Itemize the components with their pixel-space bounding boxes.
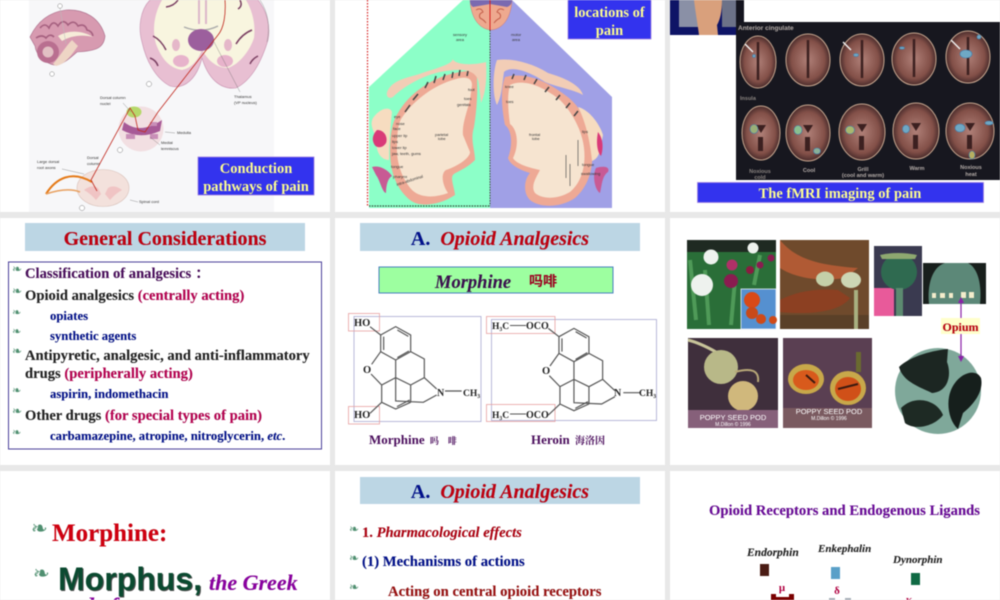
heading: general considerations: General Considerations (64, 228, 267, 250)
anatomy labels (37, 40, 257, 204)
scan labels: Anterior cingulate (738, 25, 794, 32)
chart: morphine structure: HO (354, 410, 370, 421)
text block: classification of analgesics: carbamazepine, atropine, nitroglycerin, etc. (50, 429, 285, 443)
motor cortex: area (512, 37, 521, 42)
scan labels: Grill (857, 167, 869, 173)
chart: morphine structure: O (363, 365, 371, 376)
arrows on scans (745, 40, 960, 52)
caption: morphine: Morphine 吗 啡 (369, 432, 457, 447)
subheading: morphine (379, 267, 613, 293)
ligand: enkephalin: Enkephalin (817, 543, 871, 555)
subheading: morphine: 吗啡 (529, 274, 557, 290)
photo: raw opium lumps (895, 348, 982, 434)
scan labels: Noxious (960, 165, 982, 171)
callout: fMRI imaging of pain (698, 182, 984, 202)
anatomy labels: Medial (161, 140, 173, 145)
sensory cortex: intra-abdominal (396, 174, 424, 187)
heading: opioid analgesics: A. Opioid Analgesics (411, 228, 589, 250)
sensory cortex: nose (396, 121, 405, 126)
photo: dried poppy seed pods: M.Dillon © 1996 (715, 421, 751, 428)
text block: mechanisms: ❧ (349, 551, 359, 565)
ligand: endorphin: μ (779, 582, 786, 594)
chart: morphine structure (348, 314, 481, 424)
scan labels: heat (965, 172, 977, 178)
text block: morphine definition (31, 516, 298, 600)
activation spots (750, 35, 993, 159)
anatomy labels: Dorsal (87, 155, 99, 160)
anatomy labels: Medulla (177, 130, 192, 135)
text block: morphine definition: Morphus, (58, 561, 202, 597)
anatomy labels: Spinal cord (139, 199, 159, 204)
photo: cut poppy seed pods (783, 338, 872, 428)
ligand: dynorphin (892, 554, 943, 600)
text block: classification of analgesics: ❧ (12, 284, 22, 298)
scan labels: Cool (803, 168, 816, 174)
scan labels (738, 25, 982, 181)
sensory cortex: upper lip (392, 133, 408, 138)
text block: mechanisms: 1. Pharmacological effects (362, 525, 522, 541)
panel: conduction pathways of pain (0, 0, 330, 212)
text block: classification of analgesics: synthetic agents (50, 329, 136, 343)
chart: heroin structure: O (542, 366, 550, 377)
sensory cortex: genitals (457, 102, 471, 107)
photo: hand on sensor array (670, 0, 744, 35)
sensory cortex (372, 32, 486, 205)
motor cortex (494, 32, 608, 206)
sensory cortex: tongue (391, 164, 404, 169)
panel: opium poppy photos (670, 218, 1000, 465)
icon: medulla section (117, 106, 164, 153)
chart: heroin structure: N (614, 388, 622, 399)
text block: mechanisms: ❧ (349, 580, 359, 594)
heading: opioid analgesics (360, 477, 640, 504)
text block: classification of analgesics: Opioid analgesics (centrally acting) (25, 288, 244, 304)
chart: heroin structure: OCO (526, 410, 549, 421)
panel: pharmacological effects (335, 471, 665, 600)
ligand: enkephalin (817, 543, 871, 600)
anatomy labels: Dorsal column (100, 95, 126, 100)
chart: heroin structure: H₃C (492, 411, 509, 421)
icon: spinal cord section (46, 170, 129, 211)
sensory cortex: face (393, 126, 401, 131)
panel: general considerations (0, 218, 330, 465)
sensory cortex: area (456, 37, 465, 42)
photo: dried poppy seed pods (688, 338, 778, 428)
scan labels: cold (754, 175, 766, 181)
text block: classification of analgesics: opiates (50, 309, 88, 323)
sensory cortex: toes (464, 96, 472, 101)
text block: mechanisms (349, 522, 602, 600)
anatomy labels: Large dorsal (37, 159, 59, 164)
anatomy labels: (VP nucleus) (234, 100, 257, 105)
ligand: enkephalin: δ (834, 585, 840, 597)
figure: pain conduction pathway anatomy (29, 0, 274, 212)
callout: conduction pathways of pain: Conduction (220, 161, 292, 177)
text block: classification of analgesics: aspirin, indomethacin (50, 387, 168, 401)
ligand: endorphin (746, 547, 799, 600)
scan labels: Insula (740, 96, 757, 102)
anatomy labels: lemniscus (161, 146, 179, 151)
chart: heroin structure (486, 316, 656, 422)
text block: classification of analgesics: drugs (peripherally acting) (25, 366, 193, 382)
callout: opium with arrows (941, 297, 980, 362)
sensory cortex: parietal (435, 132, 448, 137)
text block: classification of analgesics: Classification of analgesics ： (25, 266, 209, 282)
callout: conduction pathways of pain (198, 157, 314, 195)
photo: poppy field (687, 240, 777, 329)
sensory cortex: jaw, teeth, gums (391, 151, 421, 156)
panel: cortical locations of pain (335, 0, 665, 212)
sensory cortex: lips (392, 139, 398, 144)
chart: heroin structure: H₃C (492, 322, 509, 332)
sensory cortex: lobe (438, 136, 446, 141)
text block: classification of analgesics: ❧ (12, 404, 22, 418)
callout: conduction pathways of pain: pathways of pain (203, 179, 309, 195)
scan labels: (cool and warm) (842, 173, 884, 179)
text block: classification of analgesics: Antipyretic, analgesic, and anti-inflammatory (25, 348, 310, 364)
text block: mechanisms: ❧ (349, 522, 359, 536)
panel: fMRI imaging of pain (670, 0, 1000, 212)
figure: sensory and motor homunculus (368, 0, 612, 208)
callout: fMRI imaging of pain: The fMRI imaging of pain (759, 186, 921, 202)
text block: classification of analgesics: ❧ (12, 344, 22, 358)
chart: morphine structure: HO (354, 318, 370, 329)
text block: classification of analgesics: Other drugs (for special types of pain) (25, 408, 262, 424)
photo: capsule latex exudate (923, 263, 986, 304)
chart: morphine structure: CH₃ (463, 389, 480, 399)
photo: dried poppy seed pods: POPPY SEED POD (700, 413, 767, 422)
motor cortex: lobe (532, 136, 540, 141)
text block: mechanisms: Acting on central opioid receptors (388, 584, 602, 600)
chart: morphine structure: N (437, 388, 445, 399)
sensory cortex: lower lip (392, 145, 407, 150)
callout: locations of pain (568, 0, 651, 39)
scan labels: Warm (909, 166, 925, 172)
chart: heroin structure: CH₃ (639, 389, 656, 399)
text block: mechanisms: (1) Mechanisms of actions (362, 554, 525, 570)
pathway line (91, 0, 225, 191)
photo: fMRI brain scans (736, 22, 1000, 181)
anatomy labels: nuclei (100, 101, 111, 106)
icon: brain top view (470, 0, 512, 30)
heading: general considerations (25, 223, 305, 251)
text block: morphine definition: the Greek (209, 570, 298, 595)
heading: opioid receptors: Opioid Receptors and Endogenous Ligands (709, 503, 980, 519)
motor cortex: knee (505, 84, 514, 89)
text block: classification of analgesics: ❧ (12, 426, 21, 439)
anatomy labels: root axons (37, 165, 56, 170)
panel: opioid receptors and endogenous ligands (670, 471, 1000, 600)
heading: opioid analgesics (360, 223, 640, 251)
callout: locations of pain: locations of (574, 5, 645, 21)
sensory cortex: sensory (453, 32, 467, 37)
photo: cut poppy seed pods: M.Dillon © 1996 (811, 415, 847, 422)
sensory cortex: eye (394, 114, 401, 119)
heading: opioid analgesics: A. Opioid Analgesics (411, 481, 589, 503)
motor cortex: toes (506, 99, 514, 104)
subheading: morphine: Morphine (434, 273, 511, 293)
ligand: dynorphin: Dynorphin (892, 554, 943, 566)
ligand: endorphin: Endorphin (746, 547, 799, 559)
motor cortex: frontal (529, 132, 540, 137)
anterior cingulate row (740, 31, 990, 88)
anatomy labels: column (87, 161, 100, 166)
text block: morphine definition: ❧ (33, 561, 50, 585)
motor cortex: lips (582, 129, 588, 134)
motor cortex: swallowing (581, 171, 600, 176)
anatomy labels: Thalamus (234, 94, 252, 99)
photo: green poppy capsule (874, 246, 922, 316)
callout: opium with arrows: Opium (942, 320, 979, 334)
chart: heroin structure: OCO (526, 321, 549, 332)
text block: morphine definition: ❧ (31, 516, 48, 540)
callout: locations of pain: pain (596, 23, 623, 39)
motor cortex: motor (511, 32, 522, 37)
text block: classification of analgesics: ❧ (12, 325, 21, 338)
caption: heroin: Heroin 海洛因 (531, 432, 605, 447)
text block: morphine definition: Morphine: (52, 520, 167, 547)
sensory cortex: foot (468, 87, 476, 92)
text block: classification of analgesics: ❧ (12, 384, 21, 397)
panel: morphine structure (335, 218, 665, 465)
photo: cut poppy seed pods: POPPY SEED POD (796, 407, 863, 416)
photo: hands holding poppy pods (780, 240, 869, 329)
text block: classification of analgesics: ❧ (12, 262, 22, 276)
sensory cortex: pharynx (393, 174, 407, 179)
insula row (742, 103, 994, 161)
text block: classification of analgesics: ❧ (12, 306, 21, 319)
text block: classification of analgesics (8, 262, 322, 449)
motor cortex: tongue (582, 162, 595, 167)
icon: coronal brain section (140, 0, 269, 88)
scan labels: Noxious (749, 169, 771, 175)
icon: sagittal brain section (30, 4, 105, 76)
panel: morphine etymology (0, 471, 330, 600)
